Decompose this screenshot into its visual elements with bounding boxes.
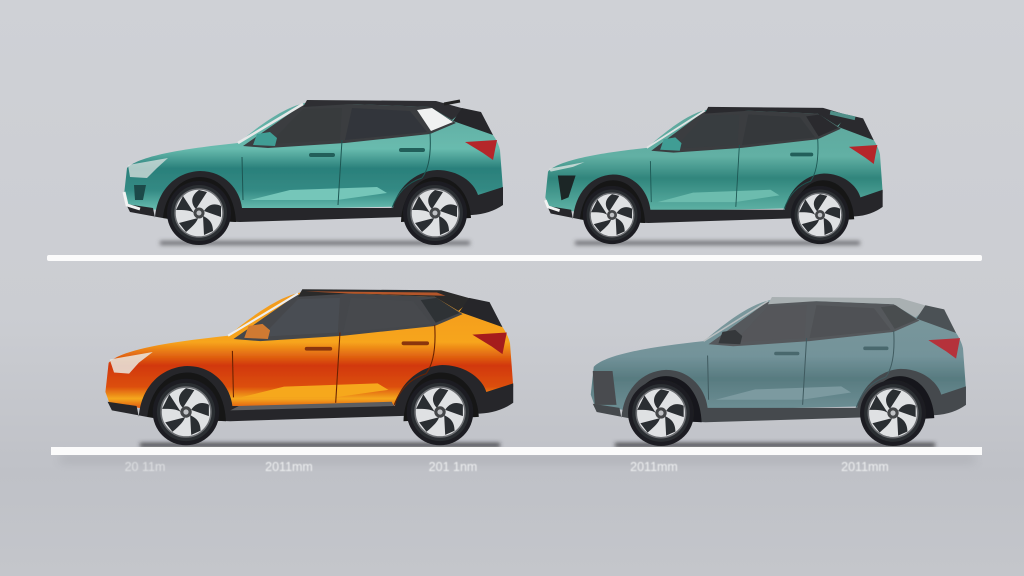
- wheel: front: [583, 186, 641, 244]
- ground shadow: top row: [160, 241, 860, 245]
- wheel: front: [628, 380, 694, 446]
- baseline shadow: [60, 456, 975, 462]
- car: teal SUV top right: [545, 107, 883, 244]
- wheel: rear: [860, 380, 926, 446]
- label 2: 2011mm: [265, 460, 313, 474]
- ground shadow: bottom row: [140, 443, 935, 447]
- car: teal SUV top left: [124, 100, 503, 245]
- label 3: 201 1nm: [429, 460, 477, 474]
- car: slate SUV bottom right: [591, 297, 966, 446]
- label 4: 2011mm: [630, 460, 678, 474]
- label 5: 2011mm: [841, 460, 889, 474]
- dimension labels: [125, 460, 889, 474]
- wheel: front: [167, 181, 231, 245]
- wheel: rear: [407, 379, 473, 445]
- baseline: bottom row: [51, 447, 982, 455]
- wheel: front: [153, 379, 219, 445]
- wheel: rear: [791, 186, 849, 244]
- wheel: rear: [403, 181, 467, 245]
- baseline: top row: [47, 255, 982, 261]
- car: orange SUV bottom left: [105, 289, 513, 445]
- label 1: 20 11m: [125, 460, 165, 474]
